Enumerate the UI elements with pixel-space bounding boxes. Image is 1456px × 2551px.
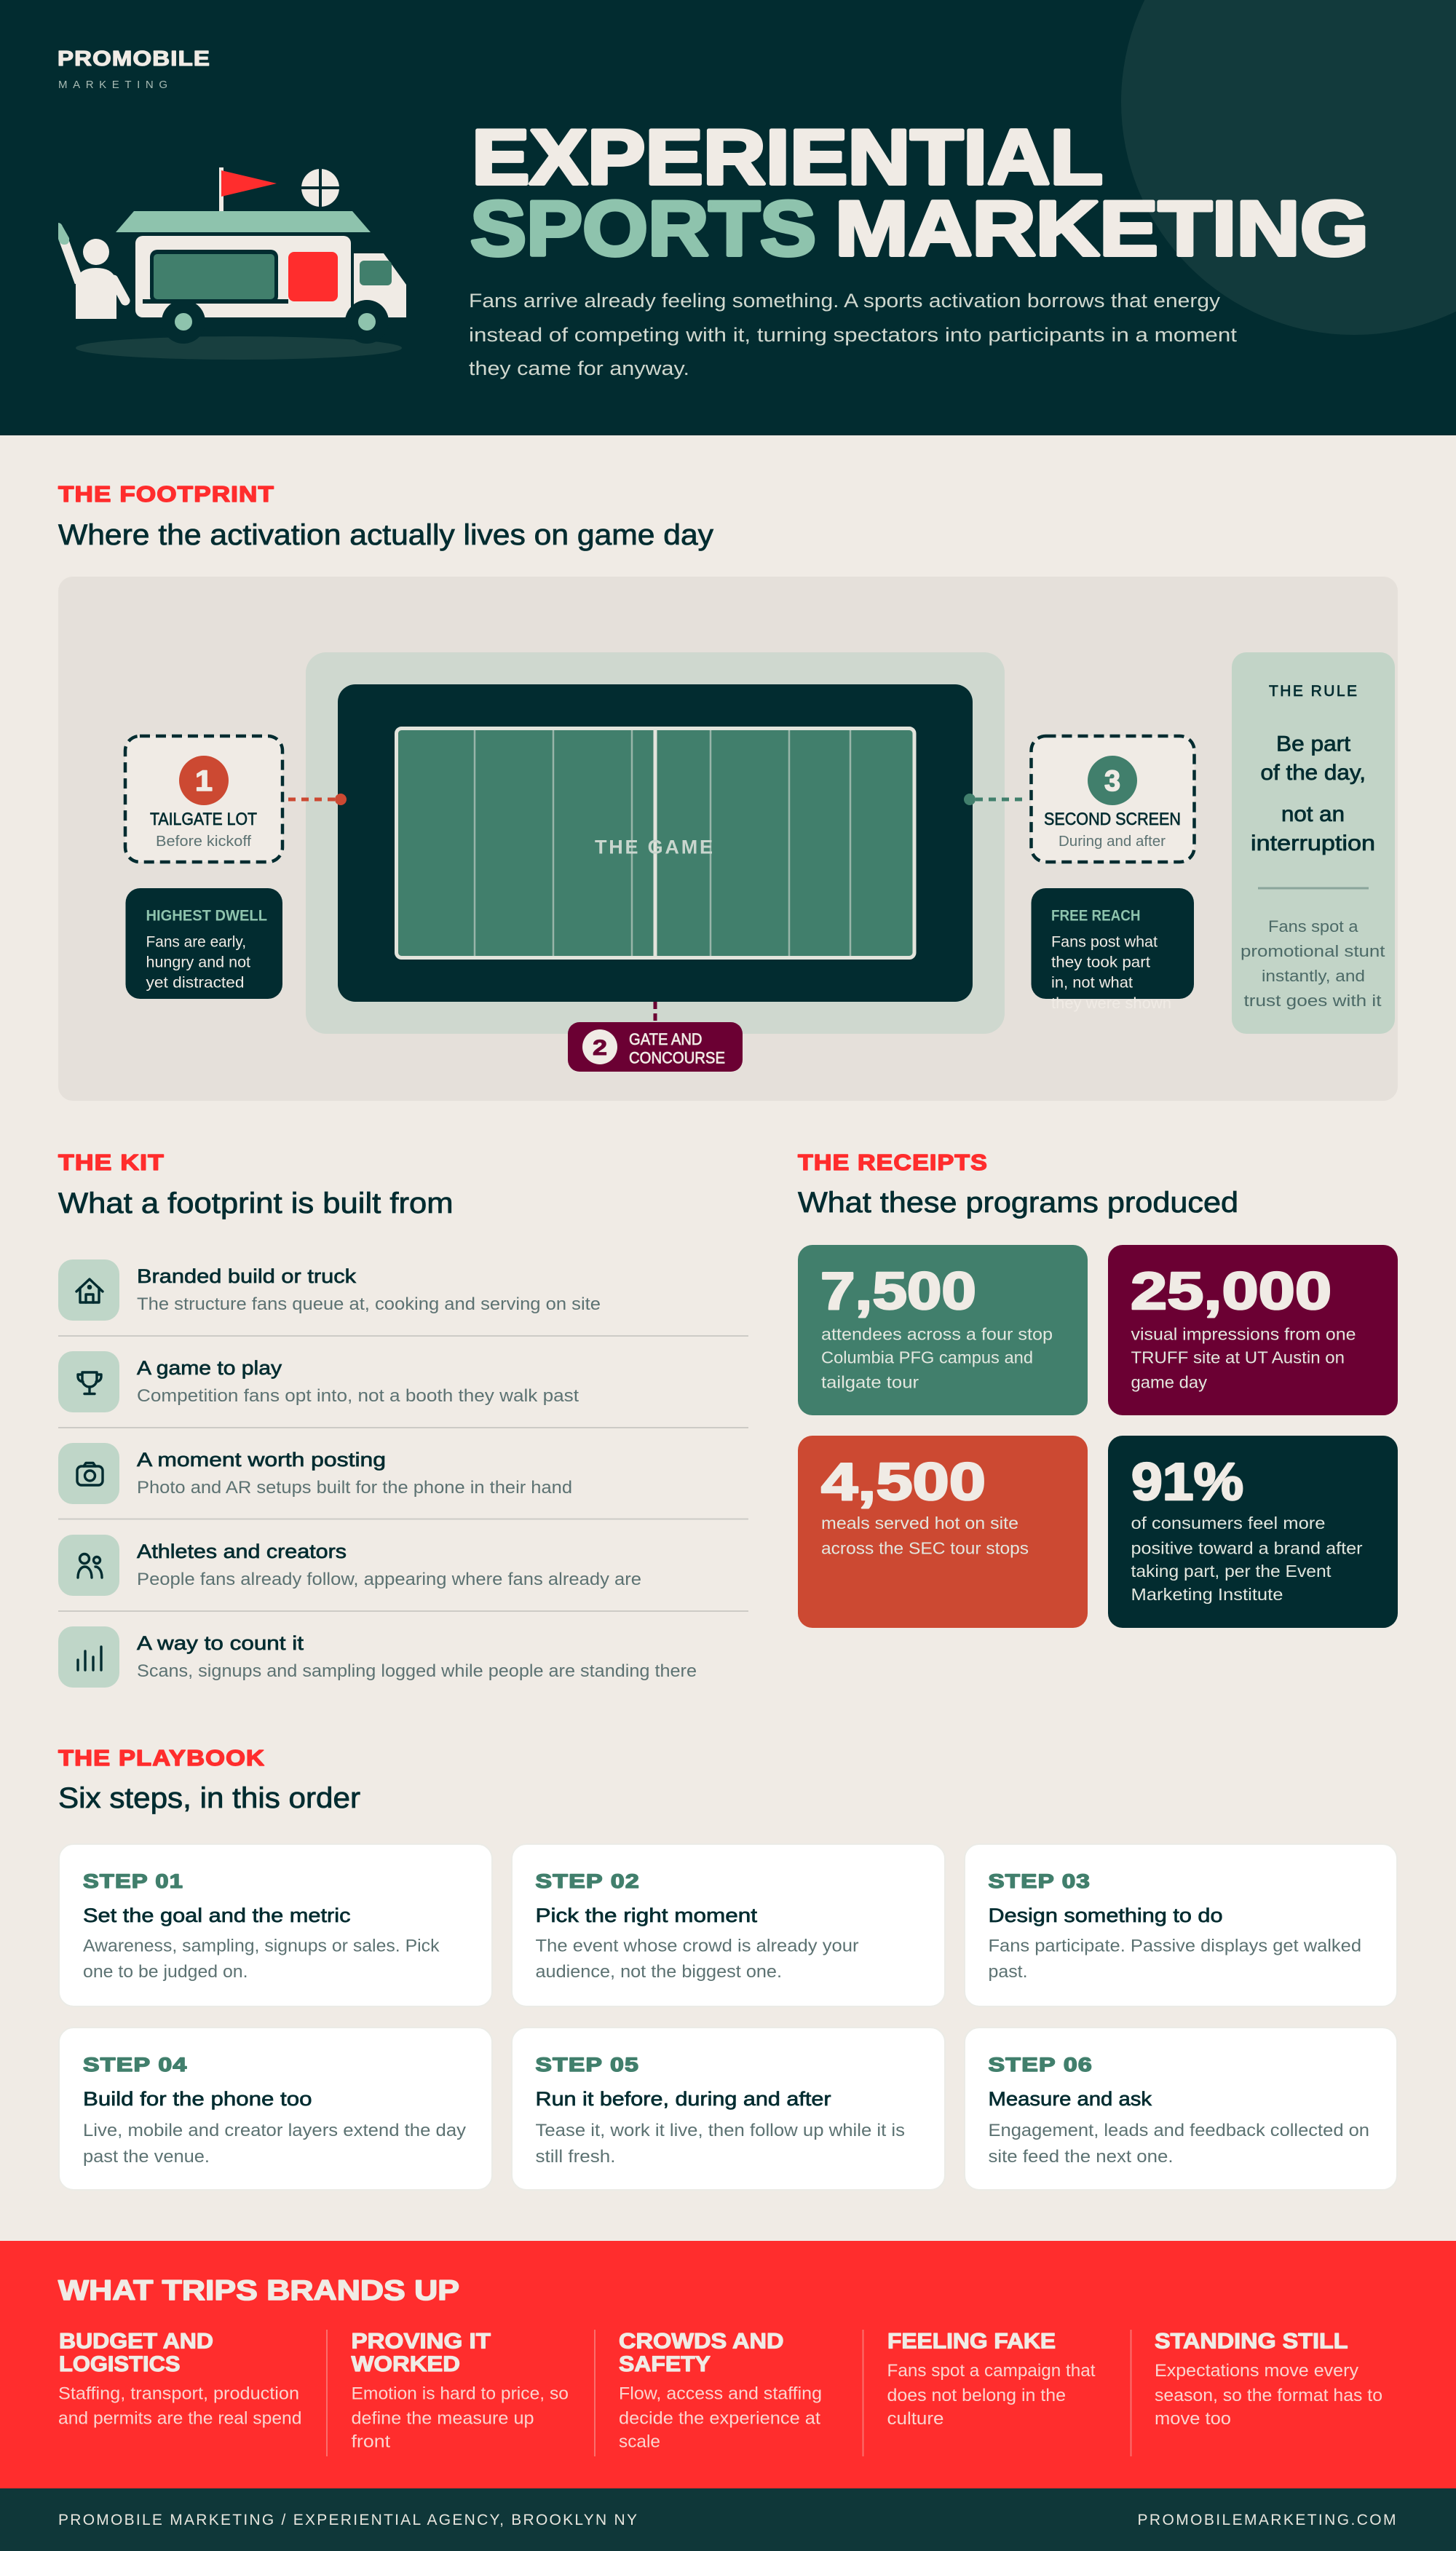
zone 2: gate and concourse: CONCOURSE xyxy=(629,1048,725,1067)
panel: the rule: instantly, and xyxy=(1262,967,1365,985)
band: what trips brands up xyxy=(0,2241,1456,2488)
kit item: a game to play xyxy=(58,1351,579,1412)
stat card: 91% xyxy=(1108,1436,1398,1628)
step card 05: Run it before, during and after xyxy=(536,2088,831,2110)
section heading: the playbook: THE PLAYBOOK xyxy=(58,1745,265,1771)
step card 04 xyxy=(59,2028,492,2190)
section heading: the receipts: THE RECEIPTS xyxy=(798,1150,988,1175)
header band xyxy=(0,0,1456,435)
stat card: 7,500: tailgate tour xyxy=(821,1373,919,1392)
kit item: branded build: The structure fans queue at, cooking and serving on site xyxy=(137,1294,601,1314)
kit item: a way to count it: Scans, signups and sampling logged while people are standing there xyxy=(137,1661,697,1681)
stat card: 25,000: TRUFF site at UT Austin on xyxy=(1131,1348,1345,1367)
challenge: budget and logistics: Staffing, transport, production xyxy=(58,2384,299,2404)
panel: footprint map xyxy=(58,577,1398,1101)
stat card: 25,000 xyxy=(1108,1245,1398,1415)
step card 05: STEP 05 xyxy=(536,2054,639,2076)
step card 02: audience, not the biggest one. xyxy=(536,1962,782,1982)
challenge: feeling fake xyxy=(887,2330,1096,2429)
zone 1: tailgate lot: 1 xyxy=(195,765,213,797)
logo: PROMOBILE xyxy=(58,47,210,71)
title: MARKETING xyxy=(835,185,1369,272)
kit item: athletes and creators xyxy=(58,1535,641,1596)
step card 05: still fresh. xyxy=(536,2147,616,2167)
panel: the rule: promotional stunt xyxy=(1241,942,1385,960)
footer: PROMOBILE MARKETING / EXPERIENTIAL AGENCY, BROOKLYN NY xyxy=(58,2512,637,2528)
callout: highest dwell: HIGHEST DWELL xyxy=(146,907,267,925)
challenge: crowds and safety: SAFETY xyxy=(619,2352,711,2376)
challenge: feeling fake: does not belong in the xyxy=(887,2386,1066,2405)
zone 3: second screen: SECOND SCREEN xyxy=(1044,810,1181,829)
arrow: zone 1 connector xyxy=(288,794,347,805)
callout: free reach: FREE REACH xyxy=(1051,907,1140,925)
panel: the rule: trust goes with it xyxy=(1243,992,1382,1010)
section heading: the footprint: Where the activation actually lives on game day xyxy=(58,519,713,551)
challenge: crowds and safety xyxy=(619,2330,822,2452)
callout: highest dwell: hungry and not xyxy=(146,954,250,971)
step card 06: STEP 06 xyxy=(989,2054,1093,2076)
step card 05: Tease it, work it live, then follow up while it is xyxy=(536,2121,905,2140)
step card 01: one to be judged on. xyxy=(83,1962,248,1982)
zone 2: gate and concourse: 2 xyxy=(593,1036,607,1060)
arrow: zone 3 connector xyxy=(964,794,1026,805)
section heading: the playbook: Six steps, in this order xyxy=(58,1782,360,1814)
stat card: 91%: of consumers feel more xyxy=(1131,1514,1325,1532)
step card 02 xyxy=(512,1844,945,2006)
kit item: a game to play: A game to play xyxy=(137,1357,282,1379)
stat card: 25,000: game day xyxy=(1131,1373,1207,1392)
step card 03: Design something to do xyxy=(989,1905,1223,1926)
panel: the rule: THE RULE xyxy=(1269,683,1357,700)
zone 1: tailgate lot: TAILGATE LOT xyxy=(150,810,257,829)
callout: free reach: they were shown xyxy=(1051,995,1171,1012)
illustration: promo truck with fan xyxy=(58,167,406,360)
zone 3: second screen: During and after xyxy=(1059,834,1166,850)
step card 03 xyxy=(965,1844,1397,2006)
stat card: 4,500: across the SEC tour stops xyxy=(821,1539,1029,1558)
step card 03: past. xyxy=(989,1962,1028,1982)
section heading: the kit xyxy=(58,1150,453,1219)
callout: free reach: Fans post what xyxy=(1051,933,1158,951)
title xyxy=(470,114,1369,272)
callout: highest dwell: yet distracted xyxy=(146,974,245,992)
stat card: 91%: positive toward a brand after xyxy=(1131,1539,1363,1558)
challenge: crowds and safety: Flow, access and staffing xyxy=(619,2384,822,2404)
logo xyxy=(58,47,210,91)
challenge: standing still: season, so the format has to xyxy=(1155,2386,1382,2405)
stat card: 91%: 91% xyxy=(1131,1453,1243,1511)
list: kit items xyxy=(58,1259,748,1688)
kit item: a way to count it xyxy=(58,1626,697,1688)
challenge: proving it worked: front xyxy=(351,2432,390,2452)
kit item: a moment worth posting: Photo and AR setups built for the phone in their hand xyxy=(137,1478,572,1498)
stat card: 25,000: 25,000 xyxy=(1131,1262,1332,1321)
playing field xyxy=(396,728,914,958)
stat card: 91%: taking part, per the Event xyxy=(1131,1562,1332,1581)
callout: free reach: they took part xyxy=(1051,954,1150,971)
challenge: standing still xyxy=(1155,2330,1382,2429)
logo: MARKETING xyxy=(58,79,167,91)
title: EXPERIENTIAL xyxy=(472,114,1103,201)
section heading: the kit: THE KIT xyxy=(58,1150,165,1175)
stat card: 7,500: attendees across a four stop xyxy=(821,1325,1053,1344)
panel: the rule: Fans spot a xyxy=(1268,917,1358,936)
section heading: the footprint xyxy=(58,481,713,551)
zone 2: gate and concourse xyxy=(568,1002,743,1072)
challenge: feeling fake: culture xyxy=(887,2409,943,2429)
zone 1: tailgate lot xyxy=(125,736,282,862)
challenge: budget and logistics: and permits are the real spend xyxy=(58,2408,302,2429)
step card 05 xyxy=(512,2028,945,2190)
challenge: proving it worked: Emotion is hard to price, so xyxy=(351,2384,569,2404)
step card 04: Live, mobile and creator layers extend the day xyxy=(83,2121,466,2140)
step card 02: STEP 02 xyxy=(536,1870,640,1892)
step card 01: Set the goal and the metric xyxy=(83,1905,350,1926)
footer: PROMOBILEMARKETING.COM xyxy=(1137,2512,1396,2528)
panel: the rule xyxy=(1232,652,1395,1034)
section heading: the receipts: What these programs produced xyxy=(798,1187,1238,1219)
stat card: 4,500 xyxy=(798,1436,1088,1628)
step card 03: Fans participate. Passive displays get walked xyxy=(989,1937,1361,1955)
fan figure xyxy=(58,223,125,319)
panel: the rule: interruption xyxy=(1251,831,1375,855)
stat card: 4,500: meals served hot on site xyxy=(821,1514,1018,1532)
intro text: instead of competing with it, turning spectators into participants in a moment xyxy=(469,324,1238,346)
challenge: crowds and safety: CROWDS AND xyxy=(619,2330,783,2353)
step card 02: The event whose crowd is already your xyxy=(536,1937,859,1955)
challenge: budget and logistics: LOGISTICS xyxy=(59,2352,181,2376)
challenge: crowds and safety: scale xyxy=(619,2432,660,2452)
section heading: the kit: What a footprint is built from xyxy=(58,1187,453,1219)
kit item: branded build: Branded build or truck xyxy=(137,1265,357,1287)
step card 02: Pick the right moment xyxy=(536,1905,758,1926)
challenge: feeling fake: FEELING FAKE xyxy=(887,2330,1056,2353)
challenge: standing still: move too xyxy=(1155,2409,1231,2429)
zone 1: tailgate lot: Before kickoff xyxy=(156,834,251,850)
kit item: athletes and creators: People fans already follow, appearing where fans already are xyxy=(137,1570,641,1589)
challenge: standing still: STANDING STILL xyxy=(1155,2330,1348,2353)
step card 06: Measure and ask xyxy=(989,2088,1152,2110)
intro text xyxy=(469,290,1238,379)
zone 3: second screen xyxy=(1031,736,1194,862)
footer xyxy=(0,2488,1456,2551)
challenge: budget and logistics: BUDGET AND xyxy=(59,2330,213,2353)
kit item: a moment worth posting xyxy=(58,1443,572,1504)
step card 04: STEP 04 xyxy=(83,2054,188,2076)
stadium bowl xyxy=(338,684,973,1002)
challenge: proving it worked: PROVING IT xyxy=(351,2330,491,2353)
section heading: the footprint: THE FOOTPRINT xyxy=(58,481,274,507)
step card 01 xyxy=(59,1844,492,2006)
section heading: the playbook xyxy=(58,1745,360,1814)
playing field: THE GAME xyxy=(595,836,713,858)
panel: the rule: not an xyxy=(1281,802,1345,826)
step card 01: STEP 01 xyxy=(83,1870,183,1892)
panel: the rule: of the day, xyxy=(1261,761,1366,785)
kit item: branded build xyxy=(58,1259,601,1321)
venue outer area xyxy=(306,652,1005,1034)
kit item: a moment worth posting: A moment worth posting xyxy=(137,1449,386,1471)
step card 01: Awareness, sampling, signups or sales. Pick xyxy=(83,1937,440,1955)
challenge: budget and logistics xyxy=(58,2330,302,2429)
title: SPORTS xyxy=(470,185,816,272)
section heading: the receipts xyxy=(798,1150,1238,1219)
zone 3: second screen: 3 xyxy=(1104,765,1120,797)
stat card: 7,500: 7,500 xyxy=(820,1262,976,1321)
step card 06: site feed the next one. xyxy=(989,2147,1174,2167)
stat card: 4,500: 4,500 xyxy=(821,1453,986,1511)
step card 04: past the venue. xyxy=(83,2147,210,2167)
zone 2: gate and concourse: GATE AND xyxy=(629,1030,702,1048)
stat card: 7,500: Columbia PFG campus and xyxy=(821,1348,1033,1367)
callout: free reach xyxy=(1031,888,1194,1012)
step card 06: Engagement, leads and feedback collected on xyxy=(989,2121,1369,2140)
callout: highest dwell: Fans are early, xyxy=(146,933,246,951)
step card 03: STEP 03 xyxy=(989,1870,1091,1892)
challenge: proving it worked: WORKED xyxy=(351,2352,460,2376)
step card 04: Build for the phone too xyxy=(83,2088,312,2110)
kit item: a way to count it: A way to count it xyxy=(137,1632,304,1654)
intro text: they came for anyway. xyxy=(469,357,689,379)
challenge: proving it worked xyxy=(351,2330,569,2452)
band heading: WHAT TRIPS BRANDS UP xyxy=(58,2275,459,2306)
challenge: feeling fake: Fans spot a campaign that xyxy=(887,2361,1096,2381)
callout: highest dwell xyxy=(125,888,282,999)
kit item: athletes and creators: Athletes and creators xyxy=(137,1541,347,1562)
step card 06 xyxy=(965,2028,1397,2190)
intro text: Fans arrive already feeling something. A sports activation borrows that energy xyxy=(469,290,1221,312)
challenge: standing still: Expectations move every xyxy=(1155,2361,1358,2381)
panel: the rule: Be part xyxy=(1276,732,1351,756)
stat card: 25,000: visual impressions from one xyxy=(1131,1325,1356,1344)
stat card: 91%: Marketing Institute xyxy=(1131,1585,1283,1604)
challenge: proving it worked: define the measure up xyxy=(351,2408,534,2429)
challenge: crowds and safety: decide the experience at xyxy=(619,2408,820,2429)
decorative circle xyxy=(1121,0,1456,335)
callout: free reach: in, not what xyxy=(1051,974,1133,992)
stat card: 7,500 xyxy=(798,1245,1088,1415)
kit item: a game to play: Competition fans opt into, not a booth they walk past xyxy=(137,1386,579,1406)
